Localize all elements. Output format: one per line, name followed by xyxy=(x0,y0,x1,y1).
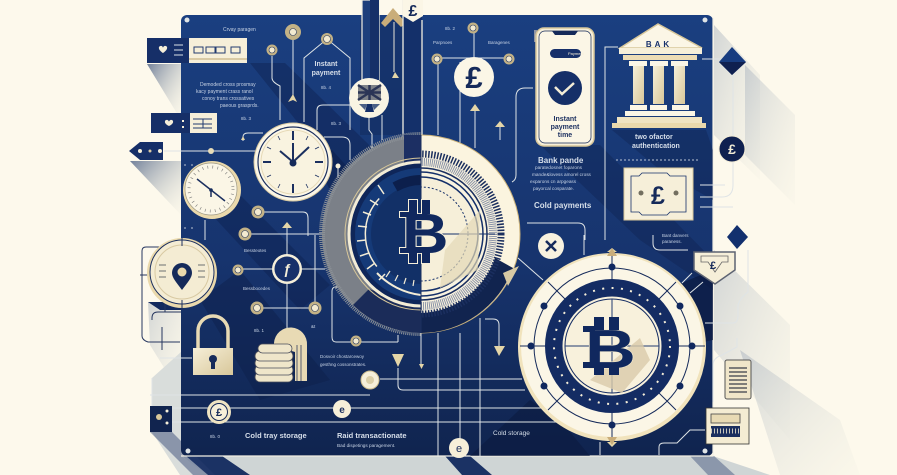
UK flag circle xyxy=(349,78,389,118)
shield pound tag xyxy=(694,252,735,284)
left half xyxy=(319,132,421,336)
small text labels: paeous grasprds. xyxy=(220,103,259,109)
panel headings xyxy=(245,61,680,440)
banknote: £ xyxy=(651,182,665,210)
small text labels: 8b. 3 xyxy=(331,121,342,126)
icon: pound circle xyxy=(454,57,494,97)
tag: heart menu second xyxy=(151,113,217,133)
icon: pound coin left xyxy=(207,400,231,424)
panel headings: two ofactor xyxy=(635,134,673,141)
ticket box xyxy=(706,408,749,444)
bank: BAK xyxy=(646,40,672,49)
bitcoin symbol centre: B xyxy=(402,201,448,265)
large bitcoin wheel xyxy=(518,248,706,445)
small text labels: Bessteotes xyxy=(244,248,267,253)
small text labels: 8b. 0 xyxy=(210,434,221,439)
central split circle xyxy=(322,135,520,333)
icon: pound coin right: £ xyxy=(728,141,736,157)
banknote xyxy=(624,168,693,220)
clock: small xyxy=(183,161,241,219)
small text labels: 8b. 1 xyxy=(254,328,265,333)
small text labels: 8b. 2 xyxy=(445,26,456,31)
panel headings: authentication xyxy=(632,143,680,150)
icon: lightning circle: ƒ xyxy=(283,261,291,277)
icon: pound coin left: £ xyxy=(216,407,222,419)
icon: bottom coin: e xyxy=(456,443,462,455)
arrow: top chevron xyxy=(381,8,406,72)
small text labels: Bant danvers xyxy=(662,233,689,238)
small text labels: exparons cn arpgeass xyxy=(530,179,577,184)
node xyxy=(208,148,214,154)
panel edge xyxy=(181,18,713,456)
small text labels: gesthng cossonstrates. xyxy=(320,362,366,367)
small text labels: &t xyxy=(311,324,316,329)
arrowheads xyxy=(241,72,617,447)
panel headings: Cold storage xyxy=(493,430,530,437)
small text labels: Demoded cross prosmay xyxy=(200,82,256,88)
panel headings: Instant xyxy=(315,61,338,68)
panel headings: Cold tray storage xyxy=(245,431,307,440)
small text labels: mande&lovess amorel cross xyxy=(532,172,592,177)
tag: arrow node xyxy=(129,142,163,160)
main navy panel xyxy=(181,15,713,456)
diamond right lower xyxy=(727,225,748,249)
small text labels: Bessbocedes xyxy=(243,286,271,291)
small text labels: Parpnoes xyxy=(433,40,453,45)
pillar left xyxy=(362,0,382,150)
tag: heart menu top xyxy=(147,38,247,63)
panel headings: Bank pande xyxy=(538,156,584,165)
clock: large xyxy=(254,123,332,201)
phone xyxy=(534,28,594,146)
icon: bottom coin xyxy=(449,438,469,458)
dashes xyxy=(184,160,700,228)
small text labels: Baragenes xyxy=(488,40,511,45)
small text labels: conoy trans crossatives xyxy=(202,96,255,102)
phone: payment xyxy=(551,124,580,131)
outer drop shadows xyxy=(130,25,860,475)
shield pound tag: £ xyxy=(710,260,716,272)
small text labels: payorcal cosparate. xyxy=(533,186,574,191)
small text labels: paratedosnet foparons xyxy=(535,165,583,170)
outer navy wiring xyxy=(140,247,181,350)
icon: lightning circle xyxy=(272,254,302,284)
padlock xyxy=(193,316,233,375)
small text labels: Bad dispetings paragement. xyxy=(337,443,395,448)
bank xyxy=(612,24,706,128)
small text labels xyxy=(196,26,689,448)
small text labels: Dosvoir chostarcewoy xyxy=(320,354,365,359)
phone: Payment xyxy=(568,51,585,56)
diamond top right xyxy=(719,47,746,75)
pillar right with pound tag xyxy=(403,0,423,137)
panel headings: Cold payments xyxy=(534,201,592,210)
small text labels: 8b. 4 xyxy=(321,85,332,90)
panel inner diagonal shadows xyxy=(200,20,713,456)
panel headings: payment xyxy=(312,70,341,77)
icon: bottom left box xyxy=(150,406,172,432)
location circle xyxy=(147,238,217,310)
connector nodes xyxy=(232,22,514,389)
small text labels: 8b. 3 xyxy=(241,116,252,121)
phone: Instant xyxy=(554,116,577,123)
icon: coin centre xyxy=(333,400,351,418)
small text labels: paraness. xyxy=(662,239,682,244)
barcode card xyxy=(725,360,751,399)
bitcoin symbol wheel: B xyxy=(585,319,636,380)
icon: coin centre: e xyxy=(339,405,345,416)
panel headings: Raid transactionate xyxy=(337,431,407,440)
icon: pound coin right xyxy=(719,136,745,162)
circuit lines xyxy=(150,33,748,456)
right half xyxy=(421,134,520,334)
icon: pound circle: £ xyxy=(465,60,483,95)
icon: close circle xyxy=(538,233,564,259)
pillar right with pound tag: £ xyxy=(409,3,418,20)
small text labels: kacy payment crass ranol xyxy=(196,89,253,95)
coin stack xyxy=(255,327,307,382)
small text labels: Crvay paragen xyxy=(223,27,256,33)
phone: time xyxy=(558,132,572,139)
corner marks xyxy=(184,18,708,454)
